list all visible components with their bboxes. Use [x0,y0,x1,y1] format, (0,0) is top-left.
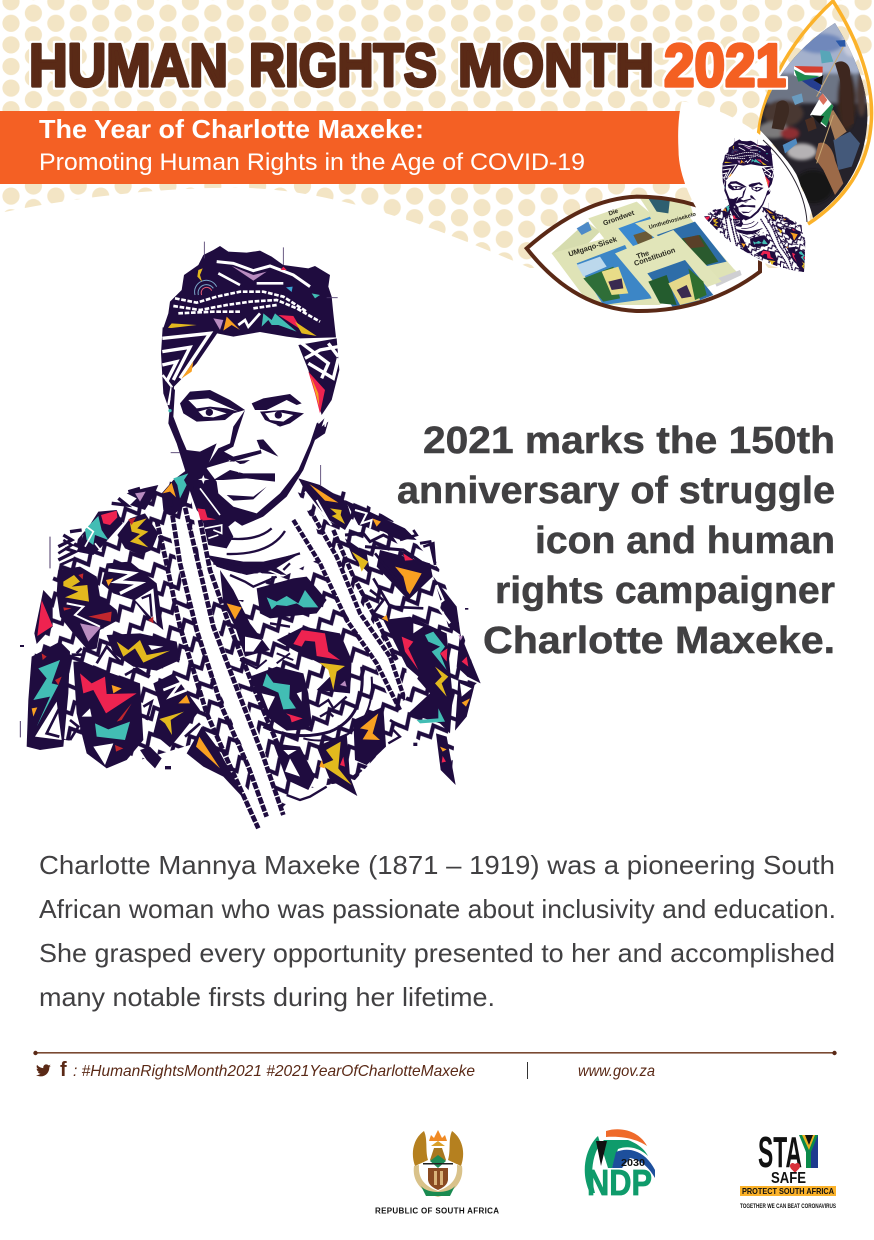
logo: Stay Safe: SAFE [771,1170,806,1187]
headline statement: anniversary of struggle [397,470,835,512]
icon: facebook: f [60,1059,67,1081]
main portrait of Charlotte Maxeke [20,242,481,828]
logo: Stay Safe: STA [758,1128,802,1177]
eye leaf: constitution booklets [527,192,760,311]
headline statement: Charlotte Maxeke. [483,620,835,662]
title: RIGHTS [249,32,437,99]
bird body [430,1148,446,1166]
shield [414,1165,462,1197]
spear and knobkierie [423,1163,453,1164]
2030: 2030 [621,1157,645,1169]
social hashtags row [36,1059,655,1081]
title: 2021 [664,32,786,99]
flag 1 [794,66,823,93]
eye leaf: constitution booklets: UMgaqo-Sisek [567,234,619,259]
biography paragraph: African woman who was passionate about inclusivity and education. [39,894,836,924]
booklet: umthetho [635,216,736,278]
eye leaf: constitution booklets: Umthethosisekelo [648,212,697,231]
arm and sleeve [815,143,843,195]
eye leaf: constitution booklets: Constitution [633,245,677,268]
hand raised [835,61,854,128]
flag Y [801,1135,818,1168]
logo: coat of arms [375,1130,499,1216]
eye leaf: constitution booklets: The [635,248,650,261]
biography paragraph: She grasped every opportunity presented to her and accomplished [39,938,835,968]
booklet: top [640,198,693,218]
biography paragraph: Charlotte Mannya Maxeke (1871 – 1919) was a pioneering South [39,850,835,880]
wings [413,1131,428,1166]
caption: REPUBLIC OF SOUTH AFRICA [375,1206,499,1216]
biography paragraph: many notable firsts during her lifetime. [39,982,495,1012]
booklet: umgaqo-sisekelo [552,235,660,305]
logo: Stay Safe: PROTECT SOUTH AFRICA [742,1186,834,1196]
sun [429,1130,447,1141]
title: HUMAN [29,32,228,99]
footer rule [33,1051,837,1055]
title [29,32,786,99]
logo: NDP 2030 [585,1129,655,1203]
booklet: far left [552,222,600,257]
headline statement: rights campaigner [495,570,835,612]
headline statement: 2021 marks the 150th [423,420,835,462]
logo: Stay Safe [740,1128,836,1210]
band heading: The Year of Charlotte Maxeke: [39,114,424,144]
logo: Stay Safe: TOGETHER WE CAN BEAT CORONAVIRUS [740,1204,836,1210]
NDP: NDP [587,1162,652,1203]
eye leaf: constitution booklets: Grondwet [602,210,636,228]
leaf outline [758,1,872,224]
booklet: the constitution [615,230,722,305]
icon: twitter [36,1064,51,1076]
biography paragraph [39,850,836,1012]
heart [790,1163,800,1173]
eye leaf: constitution booklets: Die [608,207,620,218]
orange subtitle band [0,111,685,184]
band subheading: Promoting Human Rights in the Age of COVID-19 [39,149,585,176]
headline statement: icon and human [535,520,835,562]
divider [527,1062,528,1079]
flag 2 [810,93,833,127]
photo leaf: crowd with flags [756,0,874,226]
website: www.gov.za [578,1063,655,1080]
booklet: die grondwet [588,202,654,248]
title: MONTH [458,32,654,99]
headline statement [397,420,835,662]
yellow banner [740,1186,836,1196]
small flags [820,50,833,63]
hashtags: : #HumanRightsMonth2021 #2021YearOfCharlotteMaxeke [73,1063,475,1080]
white leaf with small portrait [678,102,808,272]
